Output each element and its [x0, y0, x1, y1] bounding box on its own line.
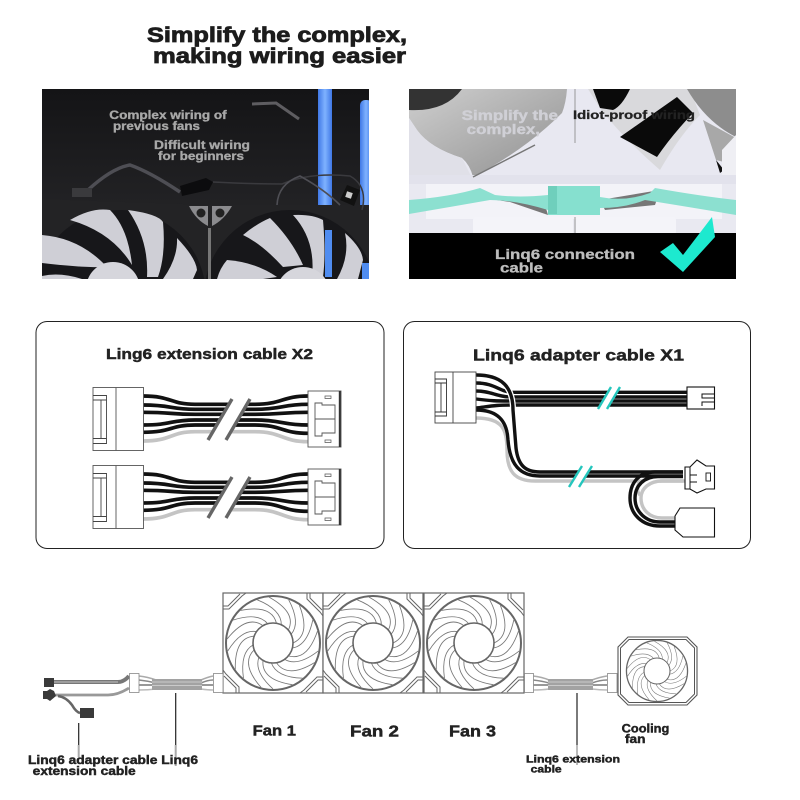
text: photo captions: complex,	[467, 121, 540, 137]
icon: fan 1	[220, 590, 324, 694]
wiring: right cable	[524, 674, 617, 692]
fan blades right	[217, 214, 363, 279]
label: extension cable: Linq6 extension	[526, 754, 620, 766]
cable diagram: bottom	[93, 466, 341, 528]
fan blades left	[42, 210, 197, 279]
loose cables	[88, 165, 364, 210]
text: photo captions: for beginners	[158, 149, 244, 163]
text: photo captions: Difficult wiring	[154, 138, 250, 152]
teal ribbon cable	[409, 188, 548, 214]
blurred loose cable	[252, 103, 299, 119]
label: adapter and extension cable: extension cable	[33, 764, 136, 778]
fan frames	[203, 205, 369, 279]
text: photo captions: Linq6 connection	[495, 246, 635, 262]
black band	[409, 233, 736, 279]
panel: extension cable	[36, 322, 384, 548]
corner brackets	[189, 206, 232, 226]
title	[147, 24, 407, 68]
frame and housings	[472, 175, 736, 176]
label: adapter and extension cable: Linq6 adapter cable Linq6	[28, 753, 198, 767]
icon: fan 2	[320, 590, 424, 694]
label: fan 1: Fan 1	[253, 723, 296, 740]
text: photo captions: Idiot-proof wiring	[573, 108, 695, 122]
label: extension cable	[526, 754, 620, 776]
label: adapter and extension cable	[28, 753, 198, 778]
left fan opening	[409, 89, 567, 177]
icon: check mark	[660, 217, 715, 272]
text: photo captions: previous fans	[113, 119, 200, 133]
heading: Ling6 extension cable X2	[106, 347, 313, 363]
right fan opening	[588, 89, 700, 170]
label: cooling fan: Cooling	[622, 722, 669, 736]
label: cooling fan	[622, 722, 669, 746]
text: photo captions: cable	[500, 260, 543, 276]
label: fan 2: Fan 2	[350, 724, 399, 741]
heading: Linq6 adapter cable X1	[473, 348, 684, 365]
icon: fan 3	[421, 590, 525, 694]
text: photo captions	[462, 107, 695, 276]
text: photo captions	[109, 108, 250, 163]
icon: blue light strips	[318, 89, 369, 205]
text: photo captions: Simplify the	[462, 107, 558, 123]
wiring: left cables	[43, 674, 223, 718]
center connector	[548, 186, 600, 215]
label: extension cable: cable	[531, 764, 562, 776]
cable diagram	[435, 372, 714, 537]
panel: adapter cable	[404, 322, 750, 548]
diagram: fan array	[220, 590, 525, 694]
icon: cooling fan	[618, 637, 697, 705]
panel: simplified connection photo	[409, 89, 736, 279]
title: making wiring easier	[153, 45, 406, 68]
title: Simplify the complex,	[147, 24, 407, 47]
cable diagram: top	[93, 388, 341, 450]
text: photo captions: Complex wiring of	[109, 108, 228, 122]
panel: complex wiring photo	[42, 89, 369, 279]
label: cooling fan: fan	[625, 732, 646, 746]
leader lines	[79, 693, 577, 766]
label: fan 3: Fan 3	[449, 724, 496, 741]
